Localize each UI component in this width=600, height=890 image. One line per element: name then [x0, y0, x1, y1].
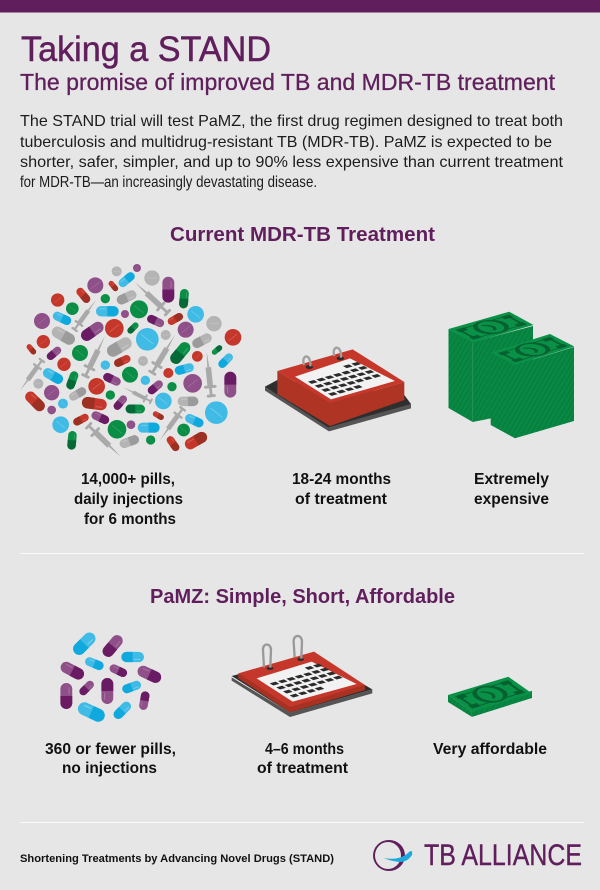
label: cost: Extremely — [474, 471, 549, 488]
logo ring — [373, 840, 405, 871]
top bar — [0, 0, 600, 12]
syringes — [16, 278, 218, 461]
label: pills — [74, 471, 183, 528]
icon: small calendar — [232, 636, 372, 717]
label: pills: for 6 months — [84, 511, 176, 528]
heading: PaMZ: PaMZ: Simple, Short, Affordable — [150, 586, 455, 608]
label: shorter duration: 4–6 months — [265, 741, 344, 758]
label: shorter duration: of treatment — [257, 760, 348, 777]
intro paragraph: The STAND trial will test PaMZ, the first drug regimen designed to treat both — [20, 113, 563, 130]
title: Taking a STAND — [21, 30, 271, 69]
intro paragraph: for MDR-TB—an increasingly devastating disease. — [20, 174, 317, 191]
label: cost: expensive — [474, 491, 549, 508]
label: fewer pills: no injections — [62, 760, 157, 777]
label: cost — [474, 471, 549, 508]
subtitle: The promise of improved TB and MDR-TB treatment — [20, 69, 556, 95]
label: pills: 14,000+ pills, — [81, 471, 175, 488]
icon: cluster of pills and syringes — [16, 264, 241, 461]
label: pills: daily injections — [74, 491, 183, 508]
label: duration: of treatment — [295, 491, 387, 508]
intro paragraph: tuberculosis and multidrug-resistant TB (MDR-TB). PaMZ is expected to be — [20, 134, 552, 151]
money stack: back — [448, 312, 534, 422]
label: affordable: Very affordable — [433, 741, 547, 758]
round tablets — [33, 264, 241, 445]
label: shorter duration — [257, 741, 348, 777]
icon: small stack of money — [448, 677, 532, 717]
icon: tall stacks of money — [448, 312, 574, 438]
heading: current treatment: Current MDR-TB Treatment — [170, 224, 435, 246]
capsules — [23, 271, 236, 453]
label: duration — [292, 471, 391, 508]
label: duration: 18-24 months — [292, 471, 391, 488]
icon: large calendar — [265, 348, 411, 431]
label: fewer pills: 360 or fewer pills, — [45, 741, 176, 758]
icon: small pill group — [59, 630, 163, 724]
intro paragraph: shorter, safer, simpler, and up to 90% less expensive than current treatment — [20, 154, 564, 171]
intro paragraph — [20, 113, 564, 191]
money stack: front — [491, 334, 574, 438]
logo swoosh — [384, 851, 412, 862]
label: fewer pills — [45, 741, 176, 777]
footer text: Shortening Treatments by Advancing Novel Drugs (STAND) — [20, 853, 334, 865]
logo: TB Alliance — [373, 839, 582, 872]
